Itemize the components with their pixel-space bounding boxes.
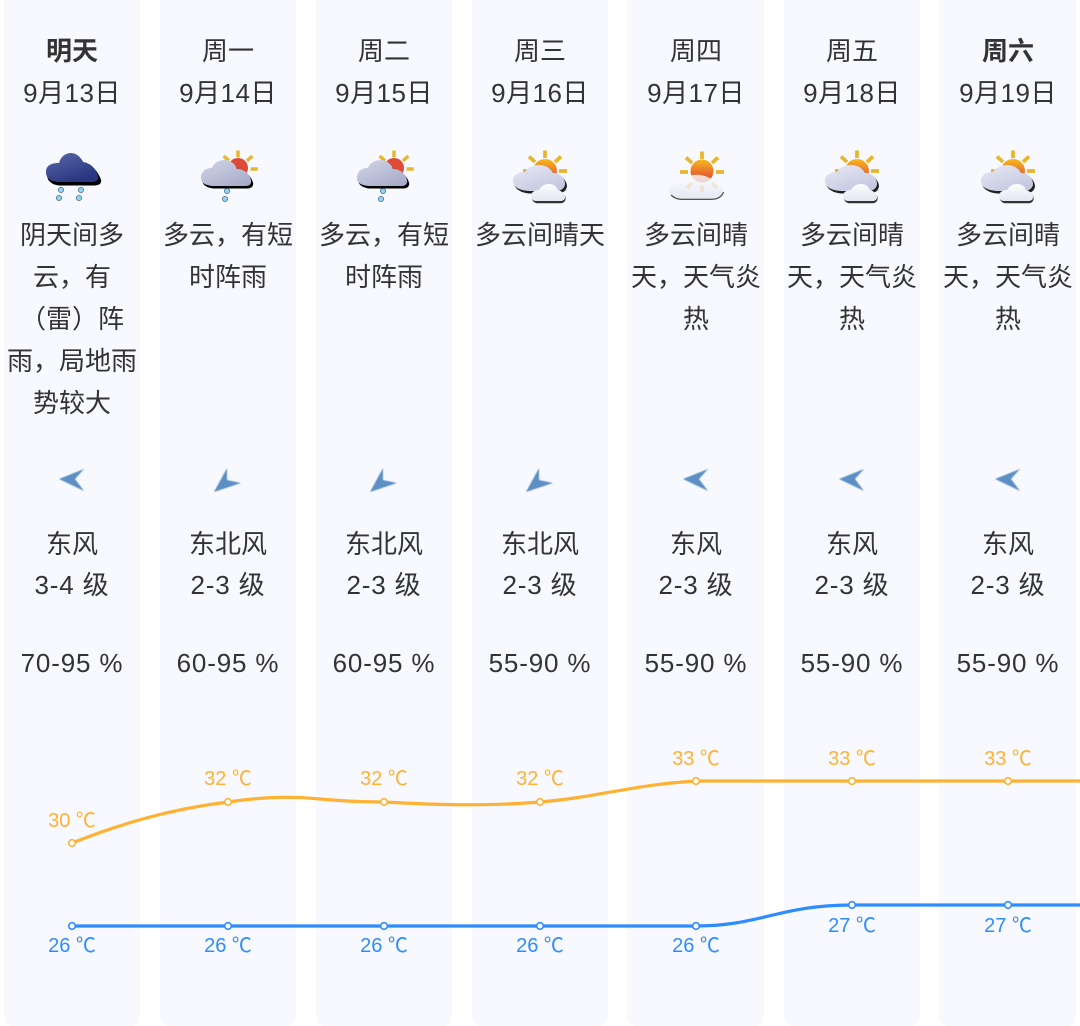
chart: high temperature line: 32 ℃ bbox=[360, 768, 408, 790]
weather description: 阴天间多 bbox=[20, 220, 124, 250]
date heading: 周五 bbox=[826, 36, 878, 66]
icon: sun behind two clouds bbox=[981, 150, 1035, 203]
wind: 2-3 级 bbox=[814, 570, 890, 600]
date heading: 明天 bbox=[46, 36, 98, 66]
panel: 周五 9月18日 bbox=[787, 36, 917, 678]
date heading bbox=[647, 36, 745, 108]
wind: 东北风 bbox=[501, 529, 579, 559]
icon: sun, cloud and shower bbox=[357, 151, 414, 202]
date heading: 9月14日 bbox=[179, 78, 277, 108]
date heading: 周六 bbox=[982, 36, 1034, 66]
chart: low temperature line: 26 ℃ bbox=[516, 935, 564, 957]
humidity: 55-90 % bbox=[645, 648, 747, 678]
icon: wind arrow bbox=[526, 468, 553, 492]
chart: high temperature line: 33 ℃ bbox=[828, 748, 876, 770]
weather description bbox=[163, 220, 293, 292]
chart: low temperature line: 26 ℃ bbox=[360, 935, 408, 957]
date heading bbox=[803, 36, 901, 108]
chart: high temperature line: 30 ℃ bbox=[48, 810, 96, 832]
wind: 2-3 级 bbox=[346, 570, 422, 600]
chart: high temperature line bbox=[48, 748, 1080, 846]
weather description bbox=[7, 220, 137, 418]
icon: wind arrow bbox=[59, 469, 84, 491]
weather description bbox=[631, 220, 761, 334]
panel: 明天 9月13日 bbox=[7, 36, 137, 678]
wind: 东北风 bbox=[189, 529, 267, 559]
date heading bbox=[959, 36, 1057, 108]
date heading bbox=[179, 36, 277, 108]
wind: 东风 bbox=[46, 529, 98, 559]
chart: high temperature line: 32 ℃ bbox=[204, 768, 252, 790]
weather description: 多云间晴 bbox=[644, 220, 748, 250]
date heading: 9月19日 bbox=[959, 78, 1057, 108]
date heading: 9月17日 bbox=[647, 78, 745, 108]
chart: low temperature line: 27 ℃ bbox=[828, 915, 876, 937]
wind: 2-3 级 bbox=[502, 570, 578, 600]
weather description: 时阵雨 bbox=[189, 262, 267, 292]
panel: 周三 9月16日 bbox=[475, 36, 605, 678]
chart: high temperature line: 33 ℃ bbox=[984, 748, 1032, 770]
wind: 东北风 bbox=[345, 529, 423, 559]
chart: low temperature line: 27 ℃ bbox=[984, 915, 1032, 937]
humidity: 55-90 % bbox=[489, 648, 591, 678]
panel: 周一 9月14日 bbox=[163, 36, 293, 678]
panel: 周二 9月15日 bbox=[319, 36, 449, 678]
wind bbox=[814, 529, 890, 600]
date heading: 9月16日 bbox=[491, 78, 589, 108]
wind bbox=[34, 529, 110, 600]
icon: wind arrow bbox=[839, 469, 864, 491]
humidity: 55-90 % bbox=[801, 648, 903, 678]
icon: wind arrow bbox=[214, 468, 241, 492]
weather description: 雨，局地雨 bbox=[7, 346, 137, 376]
weather description bbox=[787, 220, 917, 334]
weather description: 多云，有短 bbox=[319, 220, 449, 250]
chart: low temperature line: 26 ℃ bbox=[672, 935, 720, 957]
date heading: 周四 bbox=[670, 36, 722, 66]
weather description: 热 bbox=[839, 304, 865, 334]
panel: 周六 9月19日 bbox=[943, 36, 1073, 678]
weather description: 多云间晴天 bbox=[475, 220, 605, 250]
wind bbox=[345, 529, 423, 600]
weather description: 云，有 bbox=[33, 262, 111, 292]
date heading bbox=[23, 36, 121, 108]
date heading bbox=[335, 36, 433, 108]
panel: 周四 9月17日 bbox=[631, 36, 761, 678]
wind bbox=[658, 529, 734, 600]
date heading bbox=[491, 36, 589, 108]
date heading: 周三 bbox=[514, 36, 566, 66]
chart: high temperature line: 33 ℃ bbox=[672, 748, 720, 770]
icon: sun behind two clouds bbox=[825, 150, 879, 203]
date heading: 9月18日 bbox=[803, 78, 901, 108]
wind: 2-3 级 bbox=[190, 570, 266, 600]
weather description: 热 bbox=[995, 304, 1021, 334]
weather description: 天，天气炎 bbox=[631, 262, 761, 292]
icon: sun, cloud and shower bbox=[201, 151, 258, 202]
wind: 2-3 级 bbox=[658, 570, 734, 600]
wind bbox=[501, 529, 579, 600]
wind: 东风 bbox=[982, 529, 1034, 559]
date heading: 9月13日 bbox=[23, 78, 121, 108]
chart: low temperature line bbox=[48, 902, 1080, 957]
humidity: 60-95 % bbox=[333, 648, 435, 678]
chart: low temperature line: 26 ℃ bbox=[204, 935, 252, 957]
weather description: 天，天气炎 bbox=[943, 262, 1073, 292]
wind: 3-4 级 bbox=[34, 570, 110, 600]
weather description: 时阵雨 bbox=[345, 262, 423, 292]
humidity: 70-95 % bbox=[21, 648, 123, 678]
weather description bbox=[943, 220, 1073, 334]
wind bbox=[189, 529, 267, 600]
date heading: 9月15日 bbox=[335, 78, 433, 108]
wind: 东风 bbox=[826, 529, 878, 559]
weather description: （雷）阵 bbox=[20, 304, 124, 334]
icon: wind arrow bbox=[370, 468, 397, 492]
humidity: 60-95 % bbox=[177, 648, 279, 678]
weather description: 天，天气炎 bbox=[787, 262, 917, 292]
icon: wind arrow bbox=[995, 469, 1020, 491]
icon: sun over white cloud bbox=[669, 152, 724, 199]
weather description: 多云间晴 bbox=[800, 220, 904, 250]
icon: dark rain cloud bbox=[46, 153, 101, 201]
wind bbox=[970, 529, 1046, 600]
weather description bbox=[319, 220, 449, 292]
date heading: 周二 bbox=[358, 36, 410, 66]
humidity: 55-90 % bbox=[957, 648, 1059, 678]
date heading: 周一 bbox=[202, 36, 254, 66]
wind: 2-3 级 bbox=[970, 570, 1046, 600]
icon: wind arrow bbox=[683, 469, 708, 491]
weather description: 多云，有短 bbox=[163, 220, 293, 250]
chart: high temperature line: 32 ℃ bbox=[516, 768, 564, 790]
weather description: 多云间晴 bbox=[956, 220, 1060, 250]
chart: low temperature line: 26 ℃ bbox=[48, 935, 96, 957]
icon: sun behind two clouds bbox=[513, 150, 567, 203]
weather description: 势较大 bbox=[33, 388, 111, 418]
wind: 东风 bbox=[670, 529, 722, 559]
weather description: 热 bbox=[683, 304, 709, 334]
